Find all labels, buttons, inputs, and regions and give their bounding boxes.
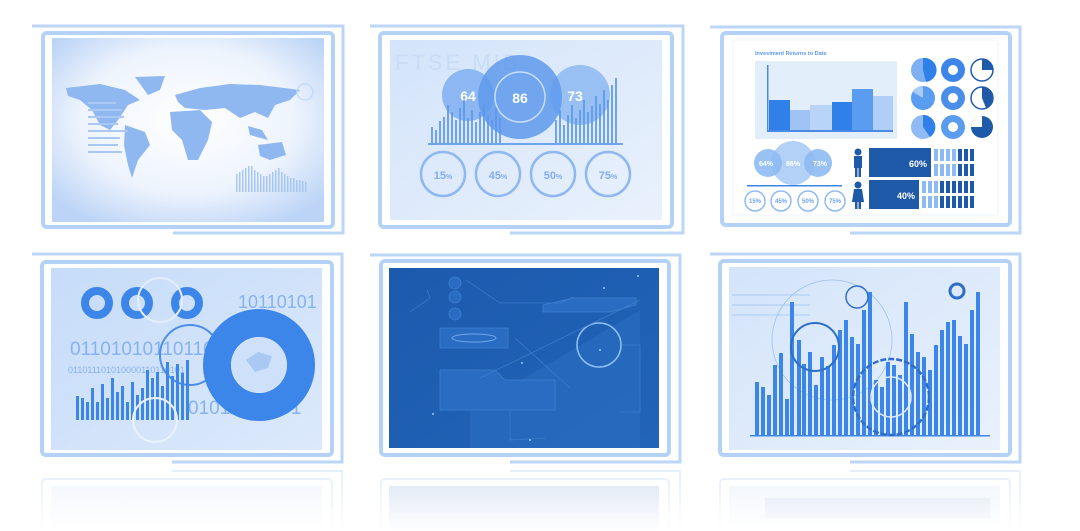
chart title: Investment Returns to Date <box>755 51 827 57</box>
rings <box>421 152 630 196</box>
bars <box>750 292 990 436</box>
binary text: 10110101 <box>238 292 317 312</box>
big donut <box>217 323 301 407</box>
venn circles: 73% <box>813 161 828 168</box>
screen 2: bubbles and rings: 50% <box>544 170 563 182</box>
screen 2: bubbles and rings: 75% <box>599 170 618 182</box>
screen 2: bubbles and rings: 15% <box>434 170 453 182</box>
bubbles: 86 <box>512 90 528 106</box>
bubbles: 64 <box>460 88 476 104</box>
binary text <box>68 292 317 419</box>
screen 2: bubbles and rings <box>370 26 683 233</box>
pie charts <box>911 58 993 139</box>
binary text: 01011011001 <box>188 398 301 419</box>
percent rings <box>745 191 845 211</box>
40% bar <box>869 180 919 209</box>
screen 2: bubbles and rings: FTSE MIB <box>395 50 520 75</box>
venn circles <box>747 141 842 186</box>
world map continents <box>66 76 300 178</box>
small bar chart <box>236 166 306 192</box>
bubbles: 73 <box>567 88 583 104</box>
screen 3: investment dashboard: 45% <box>775 199 788 205</box>
people grid <box>922 149 974 208</box>
reflections <box>42 471 1020 531</box>
screen 5: dark tech interface <box>370 255 680 462</box>
bubbles <box>442 55 610 139</box>
screen 6: bar chart with dials <box>710 254 1020 462</box>
data lines left <box>88 102 128 153</box>
binary text: 011011101010000110110101 <box>68 365 185 375</box>
screen 3: investment dashboard <box>710 27 1020 233</box>
venn circles: 64% <box>759 161 774 168</box>
screen 4: donuts and binary <box>32 254 342 462</box>
small donuts <box>85 291 199 315</box>
bar chart <box>76 360 189 420</box>
screen 3: investment dashboard: 15% <box>749 199 762 205</box>
40% bar: 40% <box>897 191 915 201</box>
venn circles: 86% <box>786 161 801 168</box>
screen 1: world map <box>32 26 343 233</box>
dials <box>791 284 964 435</box>
60% bar <box>869 148 931 177</box>
people icons <box>852 148 864 209</box>
bar chart <box>428 78 623 145</box>
60% bar: 60% <box>909 159 927 169</box>
screen 2: bubbles and rings: 45% <box>489 170 508 182</box>
bar chart <box>755 61 897 139</box>
screen 3: investment dashboard: 50% <box>802 199 815 205</box>
binary text: 0110101011011001 <box>70 339 235 360</box>
screen 3: investment dashboard: 75% <box>829 199 842 205</box>
